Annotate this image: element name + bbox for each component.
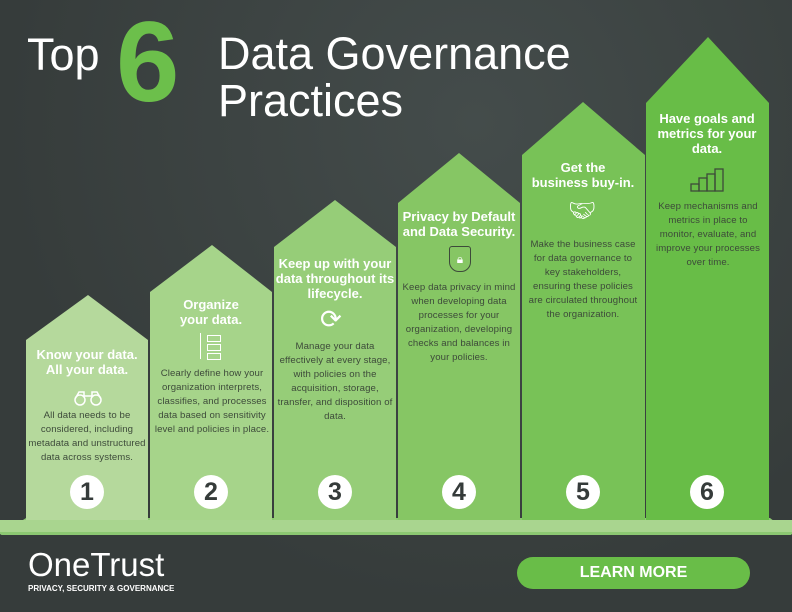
title: Top [27, 29, 100, 80]
text: Organize [183, 297, 239, 312]
text: business buy-in. [532, 175, 634, 190]
step 3 [276, 256, 394, 509]
step 5 [529, 160, 638, 509]
text: ⟳ [320, 304, 342, 334]
text: Know your data. [36, 347, 138, 362]
text: Manage your data effectively at every stage, with policies on the acquisition, storage, transfer, and disposition of data. [278, 341, 392, 422]
step 2 [155, 297, 269, 509]
title: Practices [218, 75, 403, 126]
text: Make the business case for data governance to key stakeholders, ensuring these policies are circulated throughout the organization. [529, 239, 637, 320]
title: Data Governance [218, 28, 571, 79]
text: 🤝︎ [568, 198, 596, 223]
text: Privacy by Default and Data Security. [403, 209, 515, 239]
text: Keep mechanisms and metrics in place to monitor, evaluate, and improve your processes over time. [656, 201, 760, 268]
text: 🔒︎ [457, 252, 463, 266]
text: 2 [204, 478, 218, 506]
text: Keep up with your data throughout its lifecycle. [276, 256, 394, 301]
text: All data needs to be considered, including metadata and unstructured data across systems. [28, 410, 146, 463]
text: Have goals and metrics for your data. [658, 111, 756, 156]
text: 6 [700, 478, 714, 506]
text: All your data. [46, 362, 128, 377]
text: your data. [180, 312, 242, 327]
step 1 [28, 347, 146, 509]
text: 1 [80, 478, 94, 506]
logo: OneTrust [28, 546, 164, 583]
text: Keep data privacy in mind when developing data processes for your organization, developing checks and balances in your policies. [403, 282, 515, 363]
title [27, 0, 571, 126]
text: Get the [561, 160, 605, 175]
button: LEARN MORE [580, 564, 687, 581]
step 4 [403, 209, 516, 509]
step 6 [656, 111, 760, 509]
text: 5 [576, 478, 590, 506]
title: 6 [116, 0, 179, 126]
text: Clearly define how your organization interprets, classifies, and processes data based on sensitivity level and policies in place. [155, 368, 269, 435]
logo: PRIVACY, SECURITY & GOVERNANCE [28, 584, 174, 593]
button [517, 557, 750, 589]
text: 4 [452, 478, 466, 506]
text: 3 [328, 478, 342, 506]
